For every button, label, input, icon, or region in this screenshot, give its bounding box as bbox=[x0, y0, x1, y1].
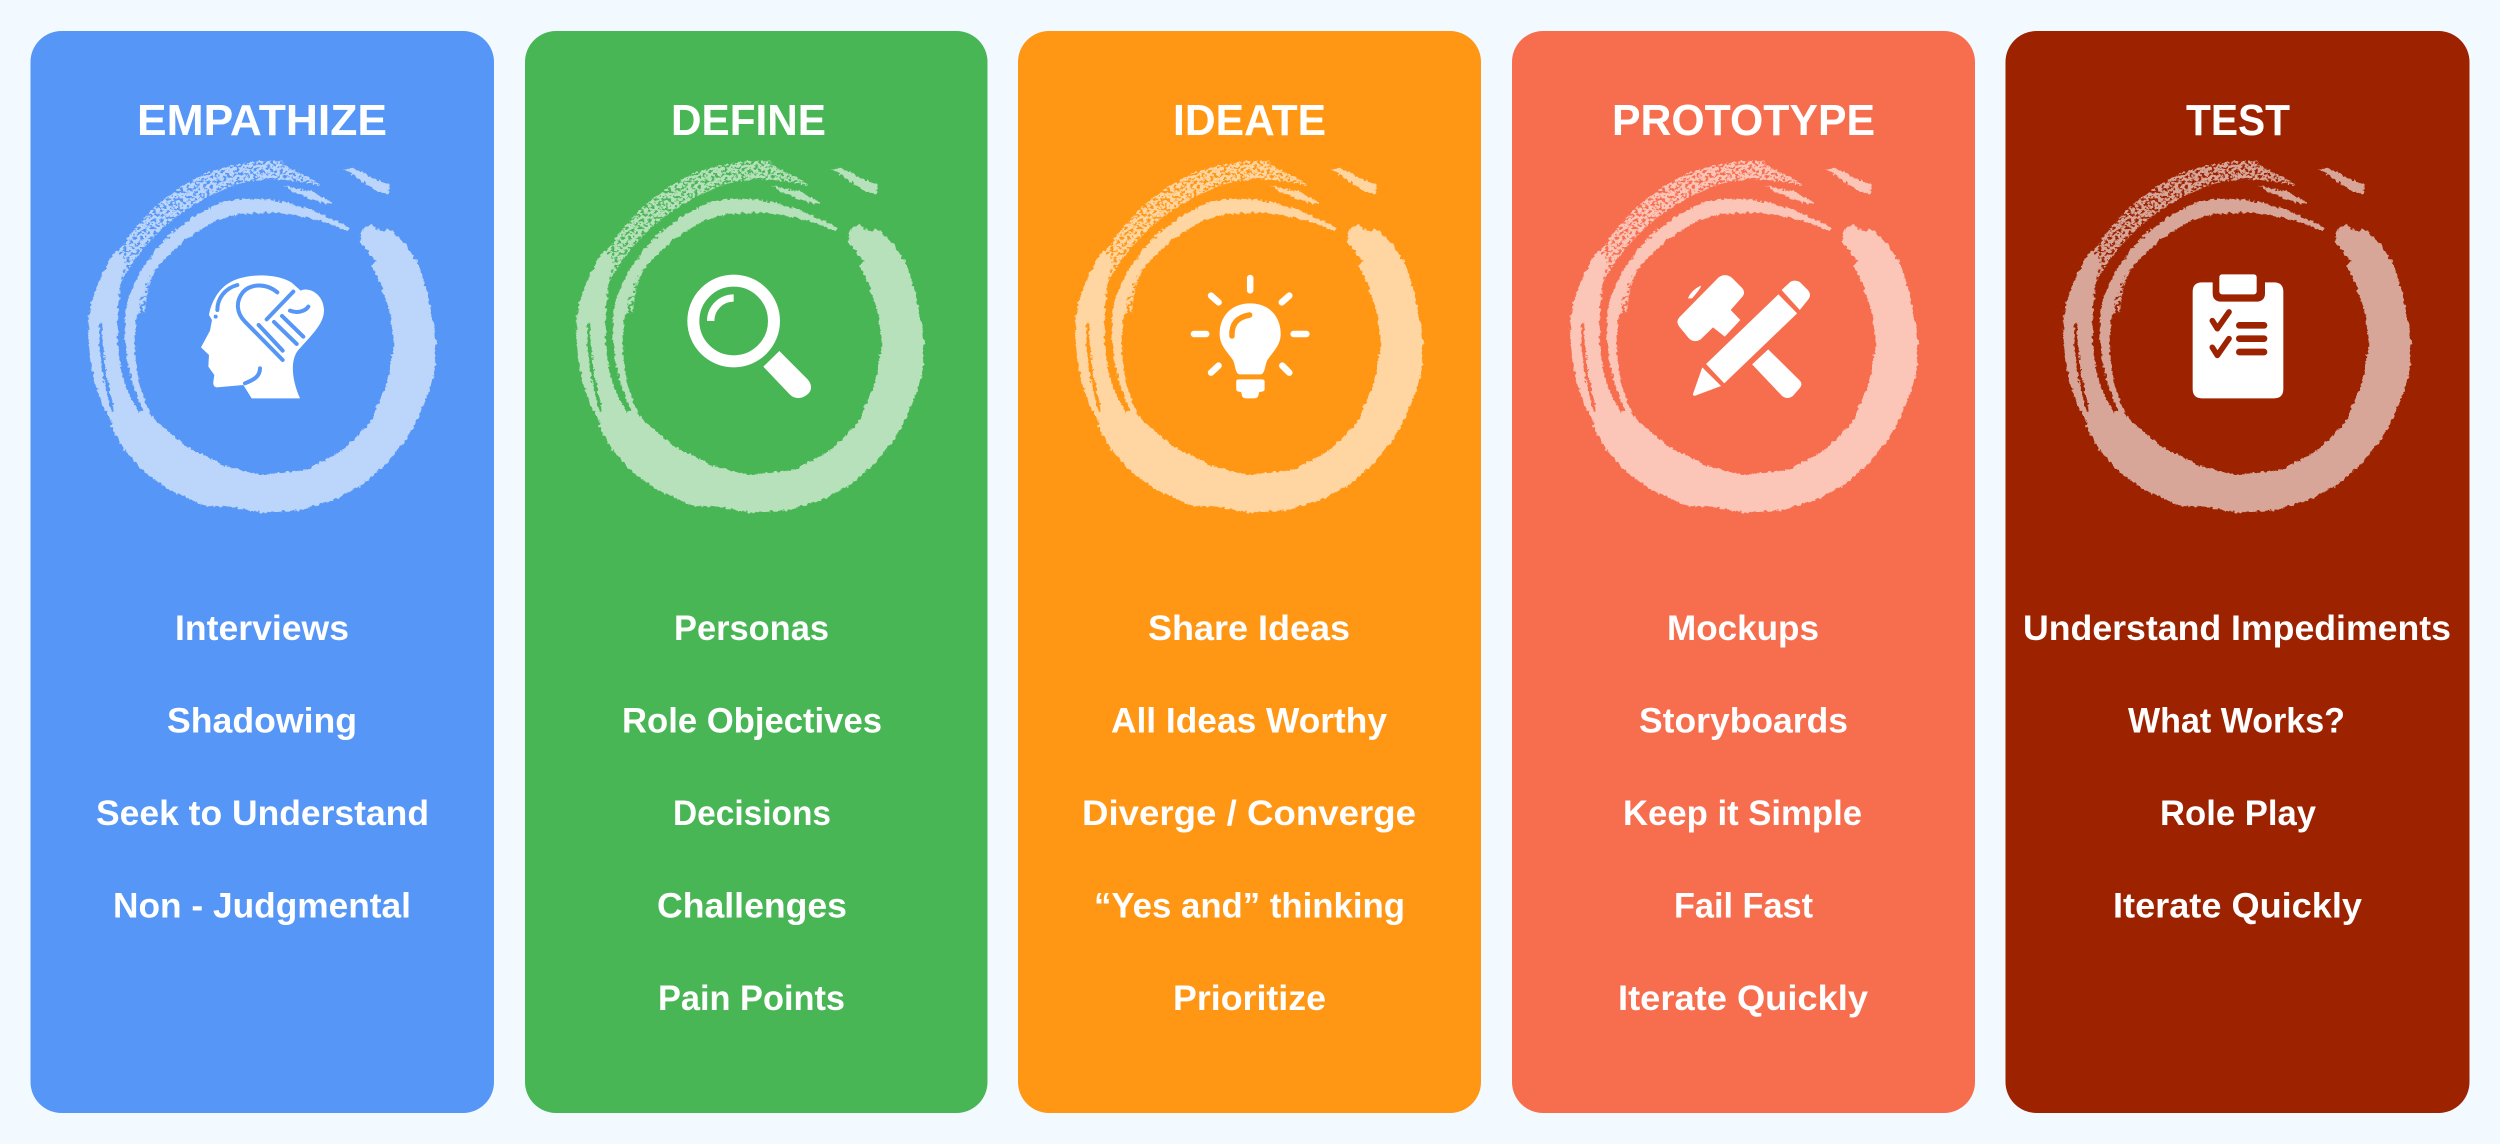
item list: Understand Impediments bbox=[2023, 609, 2451, 648]
brush ring bbox=[2063, 161, 2412, 513]
item list bbox=[96, 609, 429, 926]
item list: Prioritize bbox=[1173, 979, 1326, 1018]
item list: Personas bbox=[674, 609, 829, 648]
icon: magnifying glass bbox=[693, 281, 811, 398]
item list: Keep it Simple bbox=[1623, 794, 1862, 833]
item list: Share Ideas bbox=[1148, 609, 1350, 648]
item list: Diverge / Converge bbox=[1082, 794, 1416, 833]
panel background bbox=[2006, 31, 2470, 1113]
item list: Mockups bbox=[1667, 609, 1819, 648]
brush ring bbox=[1570, 161, 1919, 513]
panel: ideate bbox=[1018, 31, 1481, 1113]
item list: What Works? bbox=[2128, 702, 2345, 740]
heading: TEST bbox=[2186, 96, 2290, 145]
brush ring bbox=[88, 161, 437, 513]
item list: Challenges bbox=[657, 886, 847, 926]
panel background bbox=[525, 31, 988, 1113]
item list: Decisions bbox=[673, 794, 831, 833]
item list bbox=[1618, 609, 1869, 1018]
brush ring bbox=[1075, 161, 1424, 513]
item list: Role Play bbox=[2160, 794, 2317, 833]
item list: Iterate Quickly bbox=[1618, 979, 1869, 1018]
item list bbox=[1082, 609, 1416, 1018]
item list: Fail Fast bbox=[1674, 886, 1813, 926]
item list bbox=[622, 609, 882, 1018]
item list bbox=[2023, 609, 2451, 926]
icon: light bulb bbox=[1194, 278, 1306, 398]
panel: define bbox=[525, 31, 988, 1113]
panel: prototype bbox=[1512, 31, 1975, 1113]
item list: Shadowing bbox=[167, 702, 357, 740]
panel background bbox=[30, 31, 494, 1113]
heading: PROTOTYPE bbox=[1612, 96, 1875, 145]
heading: DEFINE bbox=[671, 96, 826, 145]
icon: head with handshake heart bbox=[201, 275, 324, 398]
item list: “Yes and” thinking bbox=[1094, 886, 1405, 926]
heading: IDEATE bbox=[1173, 96, 1326, 145]
item list: Non - Judgmental bbox=[113, 886, 411, 926]
brush ring bbox=[576, 161, 925, 513]
heading: EMPATHIZE bbox=[137, 96, 387, 145]
panel background bbox=[1018, 31, 1481, 1113]
panel: empathize bbox=[30, 31, 494, 1113]
icon: hammer and pencil bbox=[1677, 275, 1810, 398]
item list: Seek to Understand bbox=[96, 794, 429, 833]
item list: Storyboards bbox=[1639, 702, 1848, 740]
item list: All Ideas Worthy bbox=[1111, 702, 1388, 740]
panel background bbox=[1512, 31, 1975, 1113]
item list: Iterate Quickly bbox=[2113, 886, 2363, 926]
item list: Pain Points bbox=[658, 979, 845, 1018]
panel: test bbox=[2006, 31, 2470, 1113]
item list: Interviews bbox=[175, 609, 349, 648]
item list: Role Objectives bbox=[622, 702, 882, 740]
icon: clipboard checklist bbox=[2193, 274, 2283, 398]
